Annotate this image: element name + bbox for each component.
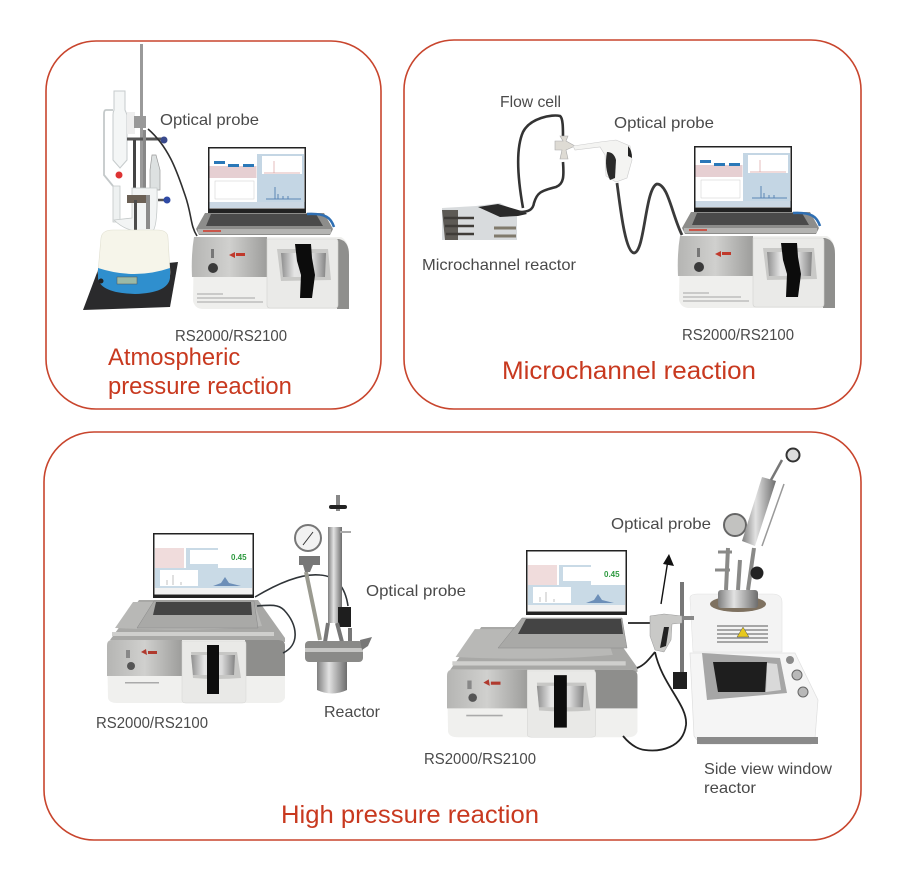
label: optical probe: Optical probe [614,115,714,132]
label: side view window reactor: reactor [704,780,757,797]
heading: atmospheric pressure reaction: Atmospheric [108,344,240,371]
label: RS2000/RS2100: RS2000/RS2100 [175,328,287,345]
heading: atmospheric pressure reaction: pressure reaction [108,373,292,400]
probe cable [148,129,197,236]
icon: microchannel reactor stack [442,203,527,240]
arrow: optical probe pointer [661,554,674,604]
label: side view window reactor: Side view window [704,761,832,778]
heading: microchannel reaction: Microchannel reaction [502,357,756,385]
cables to probe [623,623,686,750]
icon: optical probe handle [650,614,694,652]
label: optical probe: Optical probe [160,112,259,129]
left laptop keyboard [137,601,258,628]
label: flow cell: Flow cell [500,94,561,111]
label: RS2000/RS2100, right: RS2000/RS2100 [424,751,536,768]
icon: glass reactor on heating mantle [83,44,178,310]
label: optical probe, right: Optical probe [611,516,711,533]
laptop screen [694,146,792,212]
flow lines [518,116,563,212]
right laptop screen [526,550,627,615]
panel: atmospheric pressure reaction [46,41,381,409]
icon: side view window reactor [673,448,818,744]
laptop and RS2000 analyzer [678,212,835,308]
cables to high pressure reactor [255,575,348,653]
label: reactor: Reactor [324,704,381,721]
probe cable [617,183,682,253]
label: side view window reactor [704,761,832,797]
icon: flow cell [555,136,575,159]
icon: optical probe handle [573,140,632,182]
label: microchannel reactor: Microchannel reactor [422,257,577,274]
label: RS2000/RS2100: RS2000/RS2100 [682,327,794,344]
panel: high pressure reaction [44,432,861,840]
left laptop screen [153,533,254,598]
laptop screen [208,147,306,213]
icon: high pressure reactor [295,495,372,694]
panel: microchannel reaction [404,40,861,409]
laptop and RS2000 analyzer [192,213,349,309]
right analyzer with laptop [447,627,637,737]
right laptop keyboard [498,618,627,648]
label: RS2000/RS2100, left: RS2000/RS2100 [96,715,208,732]
heading: high pressure reaction: High pressure reaction [281,801,539,829]
label: optical probe, left: Optical probe [366,583,466,600]
left analyzer with laptop [107,600,285,703]
